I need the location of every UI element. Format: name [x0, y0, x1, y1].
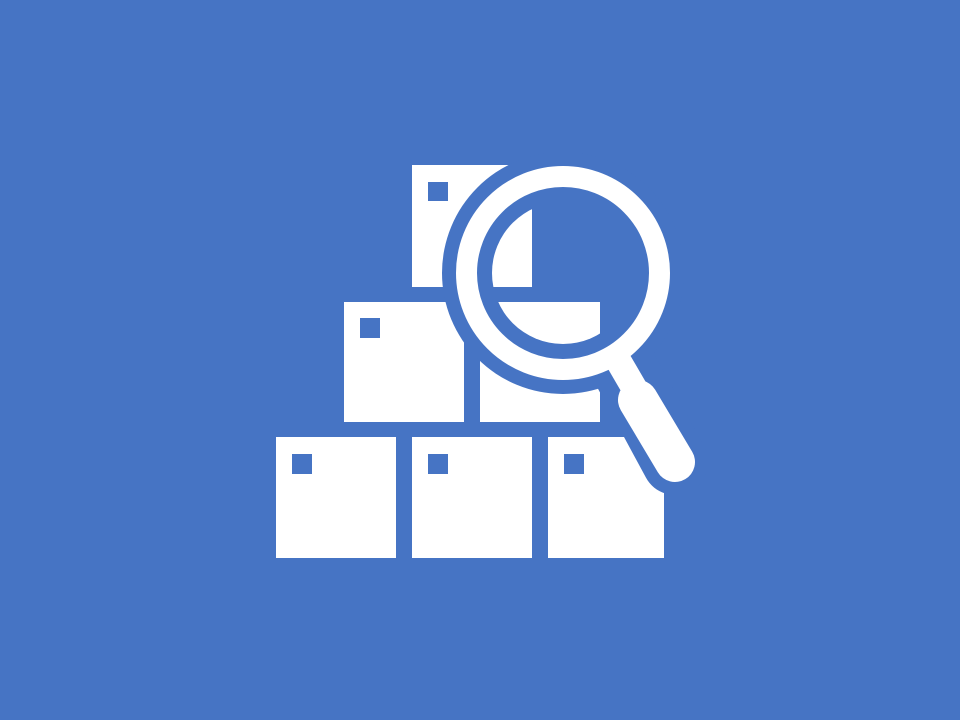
magnifying glass	[456, 166, 695, 482]
magnifier halo	[442, 152, 684, 462]
stacked boxes	[276, 165, 664, 558]
box markers	[292, 182, 584, 474]
icon: boxes under magnifying glass	[276, 165, 695, 558]
